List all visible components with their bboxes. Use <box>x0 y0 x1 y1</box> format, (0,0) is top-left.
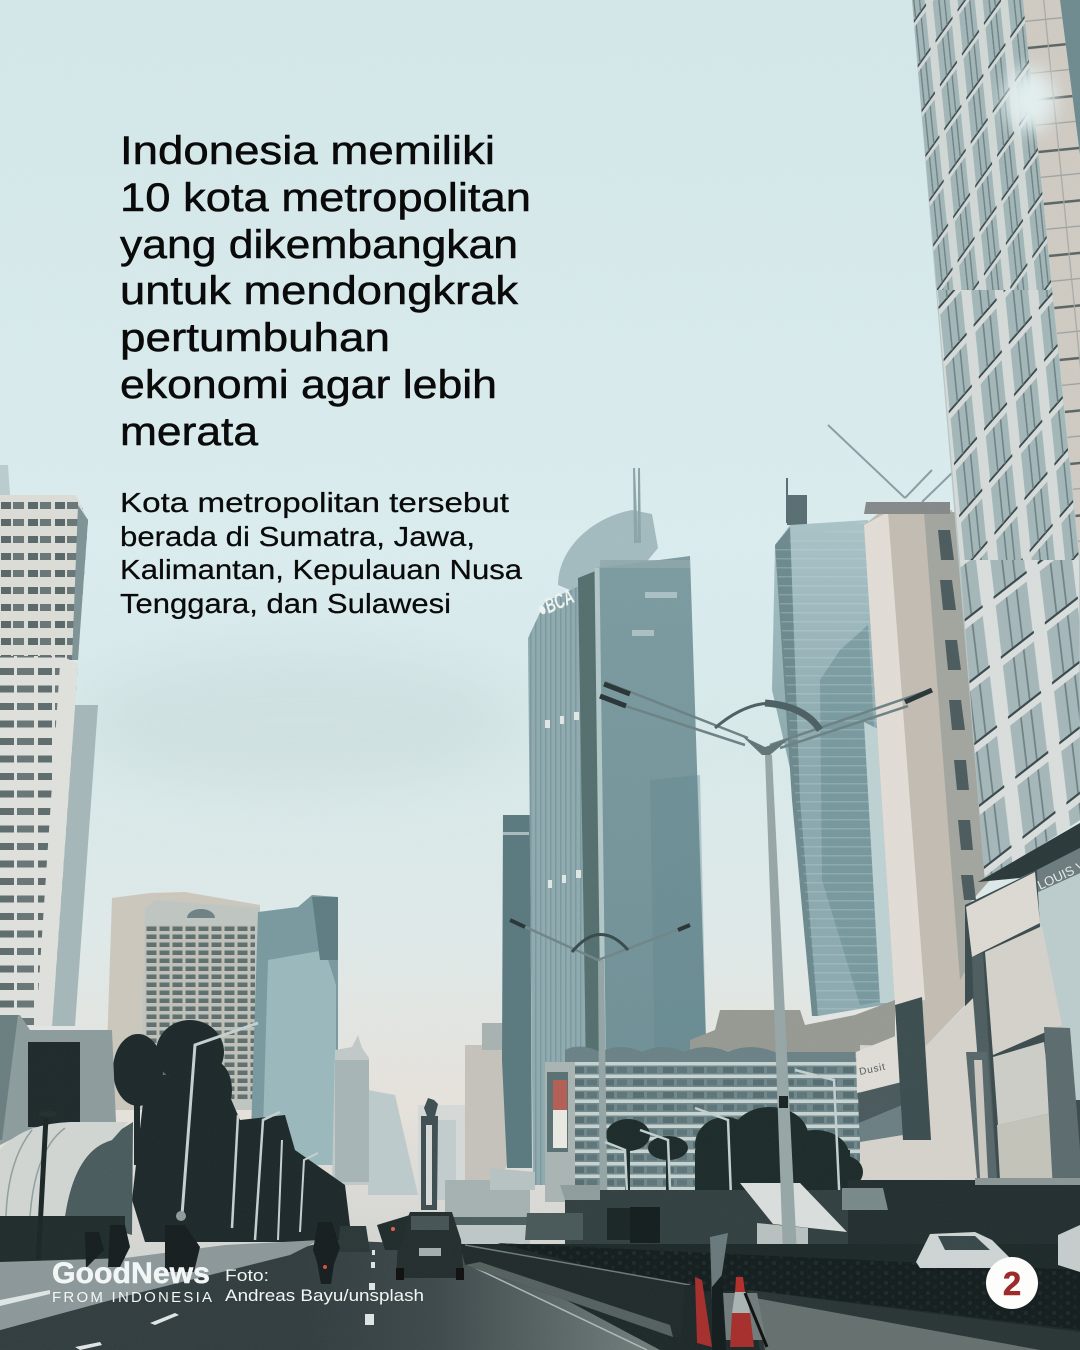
white sign <box>856 1035 900 1093</box>
building: dark tower behind BCA <box>502 815 532 1168</box>
road barrier <box>460 1245 690 1340</box>
sign and post <box>710 1233 728 1300</box>
frame <box>966 1052 997 1178</box>
trees: left palms and tree mass <box>113 1020 352 1242</box>
shop front <box>997 1113 1056 1180</box>
lane markings <box>0 1250 375 1350</box>
cone right <box>735 1277 745 1292</box>
logo: GoodNews from Indonesia <box>52 1257 212 1306</box>
ground base <box>450 1244 1080 1350</box>
logo: GoodNews from Indonesia: FROM INDONESIA <box>52 1289 212 1306</box>
building: Mandarin hotel <box>105 892 260 1110</box>
building: left dark low block <box>0 1015 116 1145</box>
crown <box>558 510 658 590</box>
sidewalk <box>0 1240 320 1330</box>
second street lamp <box>510 920 690 1240</box>
street light poles: left row <box>182 1023 318 1240</box>
cone left <box>695 1277 712 1347</box>
building: right glass tower facade <box>912 0 1080 882</box>
vehicles: white car <box>916 1225 1080 1272</box>
bridge <box>445 1168 535 1250</box>
building: hazy distant towers <box>368 1023 507 1200</box>
road <box>0 1240 660 1350</box>
small lights <box>605 1070 842 1252</box>
subheading text: Kota metropolitan tersebut <box>120 487 509 518</box>
window column <box>924 512 990 980</box>
heading: untuk mendongkrak <box>120 269 518 313</box>
right road <box>748 1290 1080 1350</box>
blur patch <box>1004 68 1056 132</box>
building: glass tower beside hotel <box>250 895 338 1165</box>
sky cloud haze <box>80 650 520 790</box>
upper panel <box>966 872 1040 957</box>
building: left white tower rear <box>50 705 98 1026</box>
building: Louis Vuitton podium <box>965 823 1080 1190</box>
dark sign <box>859 1105 903 1142</box>
heading: Indonesia memiliki <box>120 129 495 173</box>
building: left white tower <box>0 465 88 1026</box>
columns <box>858 1082 902 1123</box>
page number badge <box>986 1257 1038 1309</box>
vehicles: black SUV <box>396 1212 464 1280</box>
photo credit: Andreas Bayu/unsplash <box>225 1286 424 1305</box>
vehicles: motorbike riders <box>85 1211 340 1284</box>
vehicles: sedan and traffic <box>338 1215 410 1252</box>
heading: ekonomi agar lebih <box>120 363 497 407</box>
canopy <box>978 823 1080 882</box>
building: white block with billboard <box>856 997 997 1180</box>
dark column <box>972 953 997 1178</box>
building: white block with billboard: Dusit <box>858 1062 886 1078</box>
traffic cones <box>680 1233 767 1350</box>
antenna <box>633 468 641 543</box>
heading: merata <box>120 410 258 454</box>
building: scalloped hotel <box>545 1046 860 1202</box>
subheading text <box>120 487 522 619</box>
window ticks <box>545 712 581 888</box>
building: glass tower under construction <box>772 478 897 1016</box>
dark billboard <box>895 997 931 1140</box>
heading: 10 kota metropolitan <box>120 176 531 220</box>
main street lamp <box>600 682 932 1255</box>
logo: GoodNews from Indonesia: GoodNews <box>52 1257 210 1290</box>
heading: pertumbuhan <box>120 316 390 360</box>
subheading text: berada di Sumatra, Jawa, <box>120 521 475 552</box>
trees: palm and hotel-side trees <box>606 1107 863 1200</box>
building: BCA tower <box>528 468 706 1185</box>
heading <box>120 129 531 454</box>
photo credit <box>225 1266 424 1305</box>
street level right buildings <box>525 1178 1080 1270</box>
lower panel <box>993 1042 1052 1125</box>
main face <box>597 556 706 1100</box>
BCA logo: ●BCA <box>534 585 578 622</box>
subheading text: Kalimantan, Kepulauan Nusa <box>120 554 522 585</box>
middle panel <box>985 926 1062 1055</box>
road curb line <box>465 1263 647 1350</box>
left face <box>528 576 606 1185</box>
dark edge column <box>578 570 606 1185</box>
monument: Selamat Datang <box>421 1098 438 1210</box>
heading: yang dikembangkan <box>120 223 518 267</box>
building: striped small tower <box>332 1035 369 1185</box>
right hedge <box>497 1243 1080 1330</box>
LV sign band <box>1037 848 1080 892</box>
subheading text: Tenggara, dan Sulawesi <box>120 588 451 619</box>
bus shelter: left <box>0 1111 133 1265</box>
photo credit: Foto: <box>225 1266 269 1285</box>
concrete bases <box>723 1293 766 1340</box>
building: tan tower <box>828 425 990 1047</box>
glass panel <box>1038 873 1080 1100</box>
crane <box>828 425 955 502</box>
page number badge: 2 <box>1003 1265 1021 1302</box>
sign tower <box>1044 1027 1080 1190</box>
building: low rear blocks <box>690 1000 895 1060</box>
